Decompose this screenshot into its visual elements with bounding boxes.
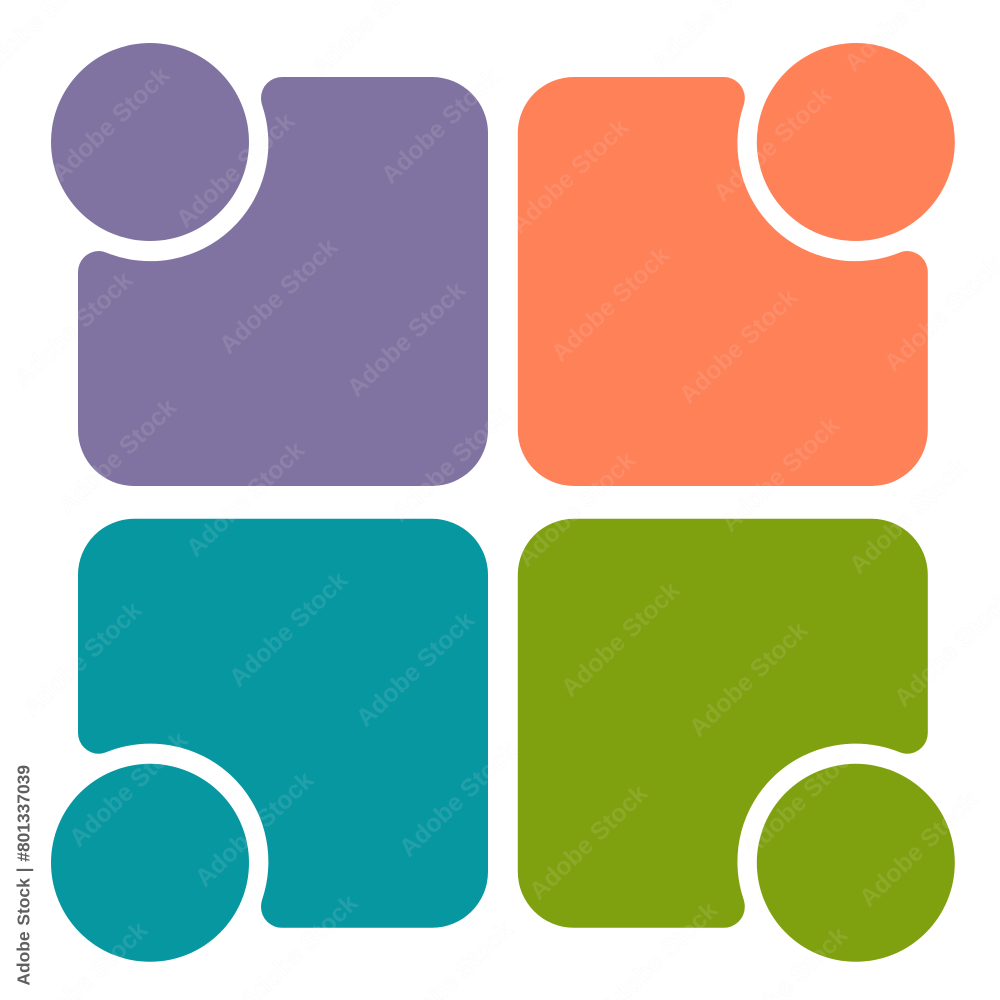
watermark pattern: Adobe Stock: [684, 616, 813, 742]
watermark pattern: Adobe Stock: [524, 779, 653, 905]
teal circle: [51, 764, 249, 962]
orange notched square: [518, 77, 928, 486]
watermark pattern: Adobe Stock: [737, 736, 866, 862]
watermark pattern: Adobe Stock: [46, 61, 175, 187]
green circle: [757, 764, 955, 962]
watermark pattern: Adobe Stock: [394, 736, 523, 862]
watermark pattern: Adobe Stock: [190, 766, 319, 892]
watermark pattern: Adobe Stock: [708, 81, 837, 207]
panel: green square with circle, bottom right: [518, 519, 955, 962]
watermark pattern: Adobe Stock: [556, 576, 685, 702]
watermark pattern: Adobe Stock: [214, 233, 343, 359]
watermark pattern: Adobe Stock: [844, 453, 973, 579]
teal notched square: [78, 519, 488, 928]
panel: orange square with circle, top right: [518, 43, 955, 486]
watermark pattern: Adobe Stock: [9, 266, 138, 392]
panel: purple square with circle, top left: [51, 43, 488, 486]
watermark pattern: Adobe Stock: [224, 566, 353, 692]
watermark pattern: Adobe Stock: [64, 726, 193, 852]
green notched square: [518, 519, 928, 928]
watermark pattern: Adobe Stock: [716, 411, 845, 537]
stock id label: Adobe Stock | #801337039: [14, 765, 34, 986]
purple notched square: [78, 77, 488, 486]
watermark pattern: Adobe Stock: [386, 401, 515, 527]
watermark pattern: Adobe Stock: [546, 241, 675, 367]
watermark pattern: Adobe Stock: [171, 107, 300, 233]
orange circle: [757, 43, 955, 241]
watermark pattern: Adobe Stock: [342, 276, 471, 402]
watermark pattern: Adobe Stock: [181, 436, 310, 562]
watermark pattern: Adobe Stock: [351, 606, 480, 732]
purple circle: [51, 43, 249, 241]
watermark pattern: Adobe Stock: [512, 446, 641, 572]
panel: teal square with circle, bottom left: [51, 519, 488, 962]
watermark pattern: Adobe Stock: [376, 63, 505, 189]
watermark pattern: Adobe Stock: [18, 596, 147, 722]
watermark pattern: Adobe Stock: [854, 786, 983, 912]
watermark pattern: Adobe Stock: [505, 113, 634, 239]
watermark pattern: Adobe Stock: [53, 393, 182, 519]
watermark pattern: Adobe Stock: [674, 283, 803, 409]
